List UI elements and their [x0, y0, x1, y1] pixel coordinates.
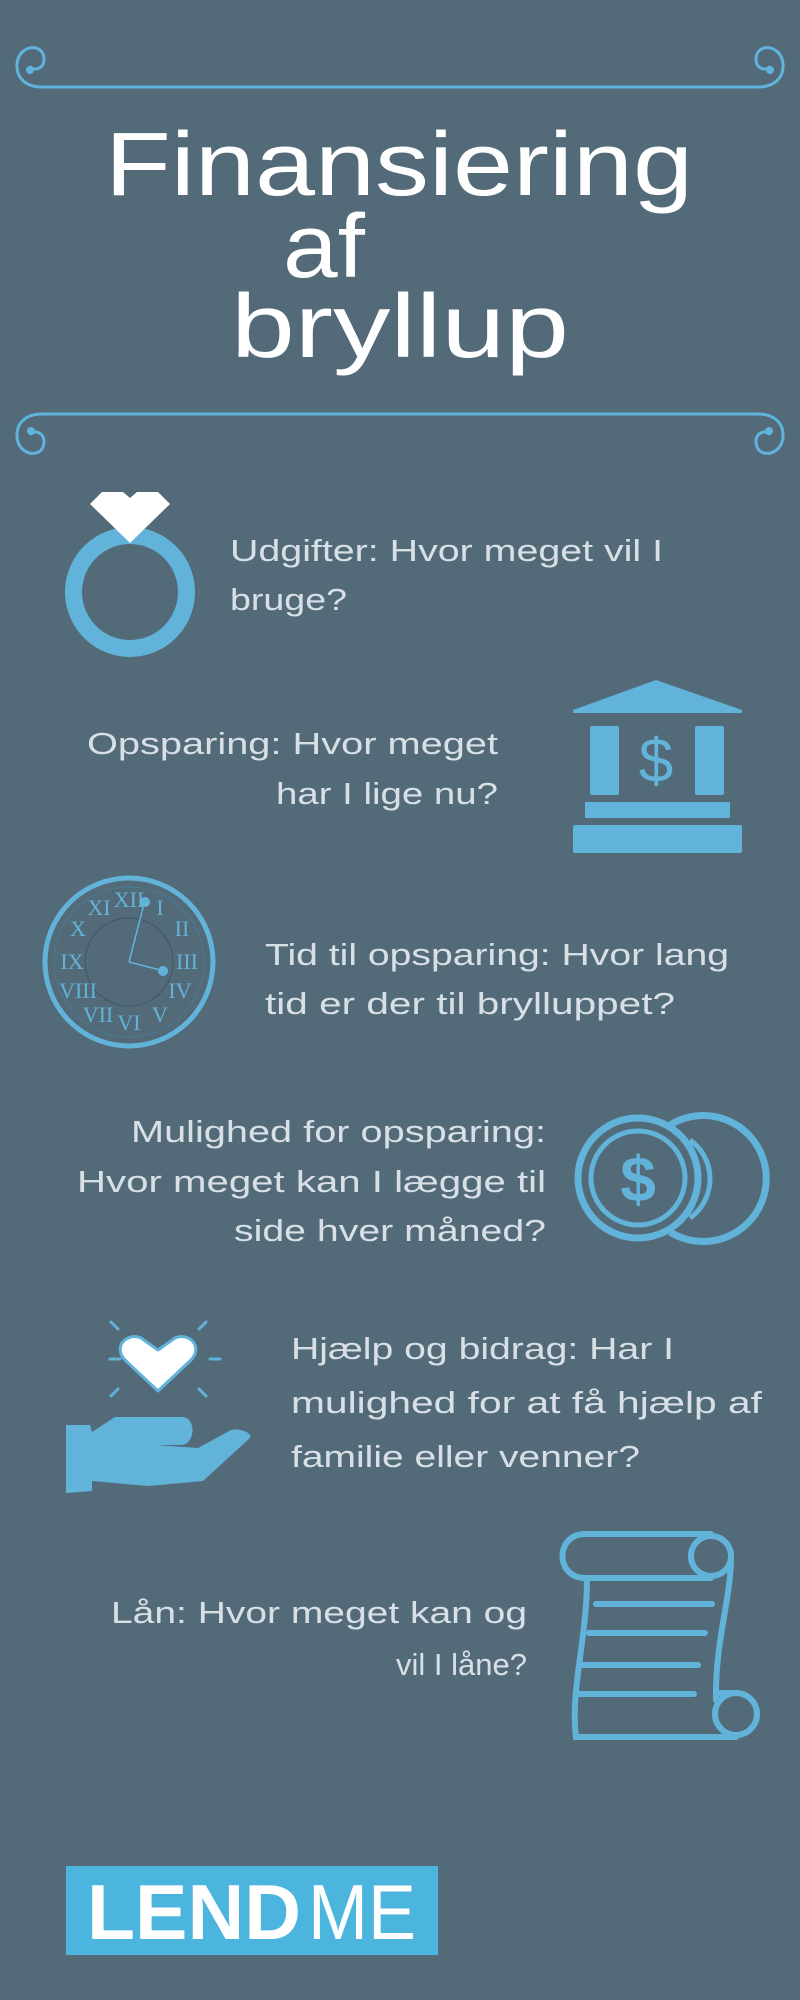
text: mulighed for opsparing: Mulighed for opsparing:: [131, 1114, 546, 1149]
icon: clock: V: [152, 1002, 168, 1027]
title: [105, 115, 693, 377]
icon: scroll: [562, 1534, 757, 1737]
text: hjælp og bidrag: familie eller venner?: [291, 1439, 640, 1474]
text: lån: Lån: Hvor meget kan og: [111, 1595, 527, 1630]
icon: coins: $: [620, 1143, 656, 1215]
title: bryllup: [231, 277, 569, 377]
ornament: top border: [17, 48, 783, 87]
icon: clock: II: [175, 916, 189, 941]
icon: hand with heart: [66, 1322, 250, 1493]
text: tid til opsparing: tid er der til brylluppet?: [265, 986, 675, 1021]
text: opsparing: [87, 726, 498, 811]
text: tid til opsparing: Tid til opsparing: Hvor lang: [265, 937, 729, 972]
icon: clock: X: [70, 916, 86, 941]
icon: clock: XII: [114, 887, 144, 912]
icon: clock: III: [176, 949, 198, 974]
text: opsparing: har I lige nu?: [276, 776, 498, 811]
logo: LENDME: ME: [308, 1868, 416, 1956]
text: hjælp og bidrag: Hjælp og bidrag: Har I: [291, 1331, 674, 1366]
text: tid til opsparing: [265, 937, 729, 1021]
icon: ring: [74, 492, 186, 648]
text: hjælp og bidrag: mulighed for at få hjælp af: [291, 1385, 762, 1420]
icon: bank: [573, 680, 742, 853]
text: udgifter: bruge?: [230, 582, 347, 617]
text: udgifter: Udgifter: Hvor meget vil I: [230, 533, 663, 568]
text: mulighed for opsparing: [77, 1114, 546, 1248]
icon: clock: VI: [117, 1010, 141, 1035]
text: mulighed for opsparing: side hver måned?: [234, 1213, 546, 1248]
logo: LENDME: [66, 1866, 438, 1956]
text: hjælp og bidrag: [291, 1331, 762, 1474]
icon: clock: IX: [60, 949, 84, 974]
icon: clock: VIII: [59, 978, 97, 1003]
text: opsparing: Opsparing: Hvor meget: [87, 726, 498, 761]
text: lån: vil I låne?: [396, 1647, 527, 1682]
title: af: [283, 197, 366, 297]
icon: clock: VII: [83, 1002, 113, 1027]
ornament: bottom border: [17, 414, 783, 453]
logo: LENDME: LEND: [87, 1868, 301, 1956]
icon: clock: XI: [87, 895, 111, 920]
text: udgifter: [230, 533, 663, 617]
text: lån: [111, 1595, 527, 1682]
text: mulighed for opsparing: Hvor meget kan I lægge til: [77, 1164, 546, 1199]
icon: coins: [578, 1116, 766, 1242]
icon: clock: IV: [168, 978, 192, 1003]
icon: clock: I: [156, 895, 164, 920]
icon: bank: $: [639, 727, 673, 796]
title: Finansiering: [105, 115, 693, 215]
icon: clock: [45, 878, 213, 1046]
